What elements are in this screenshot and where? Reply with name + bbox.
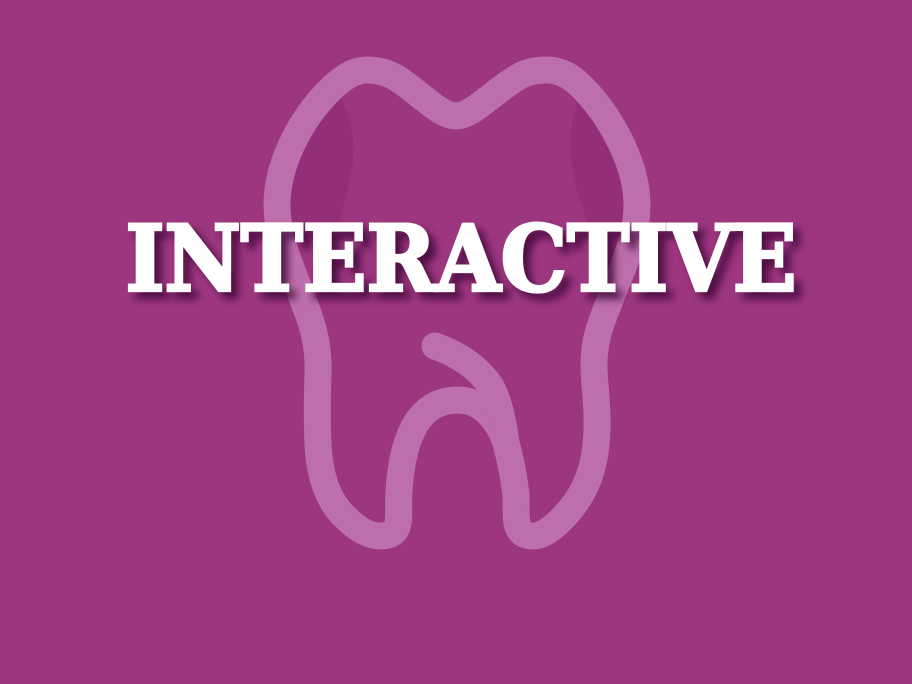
root canal hook (435, 346, 516, 495)
left shaded cavity (280, 92, 354, 228)
title: INTERACTIVE: INTERACTIVE (126, 206, 796, 312)
tooth outline (277, 70, 637, 536)
right shaded cavity (571, 100, 632, 228)
icon: tooth (277, 70, 637, 536)
